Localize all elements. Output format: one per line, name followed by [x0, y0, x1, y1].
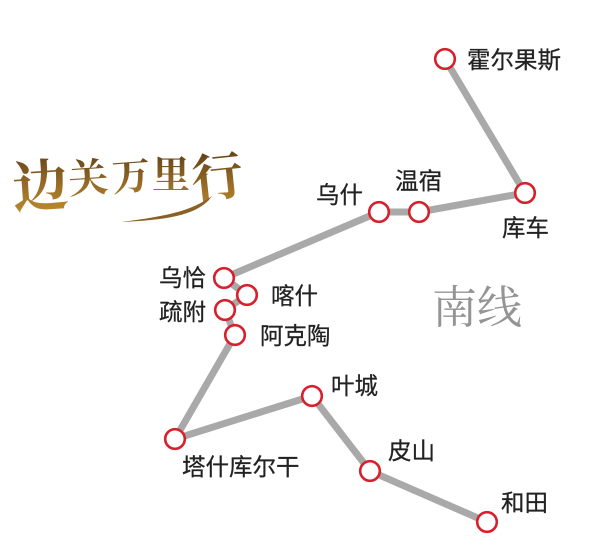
route stations [165, 49, 535, 532]
station labels: 霍尔果斯 [467, 47, 561, 73]
station labels: 和田 [501, 490, 548, 516]
station labels: 温宿 [395, 168, 442, 194]
subtitle: 南线: 南线 [432, 283, 522, 333]
title: calligraphic 边关万里行: 里 [152, 155, 190, 197]
title: calligraphic 边关万里行 [10, 148, 246, 222]
station labels: 皮山 [388, 438, 435, 464]
station labels: 乌恰 [159, 265, 206, 291]
title: calligraphic 边关万里行: 边 [10, 155, 71, 221]
station labels: 塔什库尔干 [182, 454, 300, 480]
station labels [159, 47, 561, 516]
title: calligraphic 边关万里行: 行 [189, 148, 246, 210]
route line [175, 59, 525, 522]
station labels: 喀什 [271, 283, 318, 309]
station labels: 乌什 [316, 182, 363, 208]
station labels: 库车 [502, 215, 549, 241]
station labels: 阿克陶 [260, 323, 330, 349]
title: calligraphic 边关万里行: 关 [67, 155, 110, 202]
station labels: 叶城 [331, 373, 378, 399]
title: calligraphic 边关万里行: 万 [111, 156, 152, 200]
station labels: 疏附 [159, 299, 206, 325]
